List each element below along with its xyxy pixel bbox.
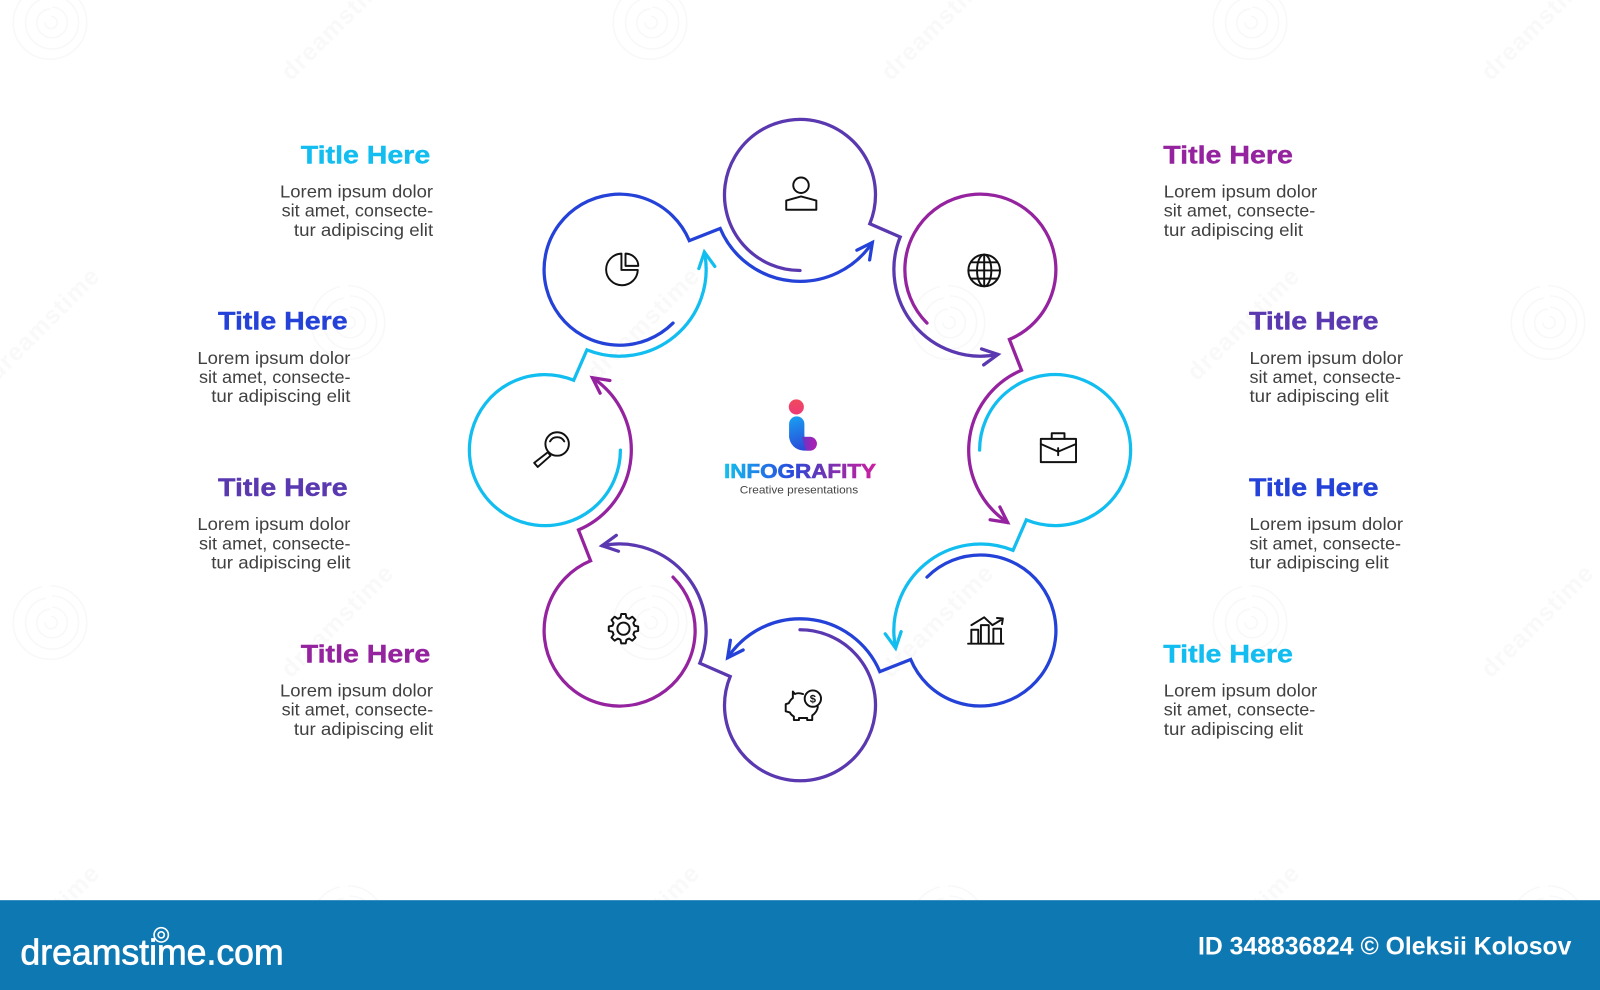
step circle and arrow: top-left blue: [513, 76, 880, 443]
text block: left row 4: tur adipiscing elit: [294, 719, 433, 739]
text block: right row 1: [1163, 141, 1318, 240]
watermark pattern: dreamstime: [1182, 262, 1306, 386]
step circle and arrow: top purple: [724, 119, 998, 365]
text block: right row 2: tur adipiscing elit: [1249, 386, 1389, 406]
text block: left row 1: tur adipiscing elit: [294, 220, 433, 240]
text block: right row 3: [1249, 474, 1403, 572]
center logo: [724, 399, 876, 496]
text block: right row 2: Title Here: [1249, 308, 1379, 336]
watermark pattern: dreamstime: [582, 262, 706, 386]
text block: left row 3: sit amet, consecte-: [199, 533, 351, 553]
text block: left row 2: sit amet, consecte-: [199, 367, 351, 387]
text block: right row 4: Title Here: [1163, 640, 1293, 668]
text block: right row 1: Lorem ipsum dolor: [1164, 181, 1318, 201]
step circle and arrow: right cyan: [885, 375, 1131, 648]
text block: right row 4: [1163, 640, 1318, 739]
icon: globe: [968, 255, 1000, 286]
text block: left row 4: sit amet, consecte-: [282, 700, 433, 720]
text block: left row 3: Lorem ipsum dolor: [197, 514, 351, 534]
text block: left row 3: tur adipiscing elit: [211, 552, 351, 572]
text block: left row 2: Title Here: [218, 308, 348, 336]
text block: left row 2: Lorem ipsum dolor: [197, 348, 351, 368]
text block: left row 2: [197, 308, 351, 406]
logo tagline: Creative presentations: [740, 484, 859, 496]
text block: right row 3: Title Here: [1249, 474, 1379, 502]
text block: left row 4: Lorem ipsum dolor: [280, 681, 433, 701]
text block: right row 3: tur adipiscing elit: [1249, 552, 1389, 572]
text block: right row 2: Lorem ipsum dolor: [1249, 348, 1403, 368]
step circle and arrow: bottom-right blue: [720, 457, 1087, 824]
logo mark: [789, 399, 817, 451]
footer banner: [0, 900, 1600, 990]
text block: right row 3: sit amet, consecte-: [1249, 533, 1401, 553]
icon: magnifier: [534, 432, 569, 467]
watermark pattern: dreamstime: [1476, 559, 1599, 683]
text block: right row 4: sit amet, consecte-: [1164, 700, 1315, 720]
footer credit: ID 348836824 © Oleksii Kolosov: [1198, 932, 1572, 960]
text block: left row 1: Title Here: [301, 141, 430, 169]
icon: piggy bank with coin: $: [810, 694, 817, 706]
text block: right row 2: [1249, 308, 1403, 406]
text block: left row 3: Title Here: [218, 474, 348, 502]
text block: left row 4: [280, 640, 433, 739]
icon: pie chart: [606, 254, 638, 285]
icon: piggy bank with coin: [786, 690, 821, 720]
watermark pattern: dreamstime: [876, 559, 999, 683]
step circle and arrow: bottom-left magenta: [426, 370, 793, 737]
text block: left row 1: [280, 141, 433, 240]
icon: briefcase: [1041, 433, 1076, 462]
text block: right row 1: tur adipiscing elit: [1164, 220, 1303, 240]
text block: left row 3: [197, 474, 351, 572]
text block: left row 4: Title Here: [301, 640, 430, 668]
logo wordmark: INFOGRAFITY: [724, 461, 876, 483]
text block: left row 2: tur adipiscing elit: [211, 386, 351, 406]
step circle and arrow: left cyan: [469, 252, 715, 526]
icon: person: [786, 177, 816, 210]
text block: right row 2: sit amet, consecte-: [1249, 367, 1401, 387]
text block: right row 4: tur adipiscing elit: [1164, 719, 1303, 739]
text block: right row 1: sit amet, consecte-: [1164, 201, 1315, 221]
watermark pattern: dreamstime: [1182, 860, 1306, 983]
cycle diagram: eight linked circles with arrows: [426, 76, 1174, 824]
watermark pattern: dreamstime: [276, 559, 399, 683]
text block: right row 4: Lorem ipsum dolor: [1164, 681, 1318, 701]
text block: left row 1: Lorem ipsum dolor: [280, 181, 433, 201]
watermark pattern: dreamstime: [582, 860, 706, 983]
step circle and arrow: bottom purple: [602, 535, 876, 781]
footer brand: dreamstime.com: [20, 932, 284, 972]
text block: right row 1: Title Here: [1163, 141, 1293, 169]
text block: left row 1: sit amet, consecte-: [282, 201, 433, 221]
icon: growth chart: [968, 617, 1003, 644]
text block: right row 3: Lorem ipsum dolor: [1249, 514, 1403, 534]
icon: gear: [609, 614, 638, 643]
step circle and arrow: top-right magenta: [807, 163, 1174, 530]
